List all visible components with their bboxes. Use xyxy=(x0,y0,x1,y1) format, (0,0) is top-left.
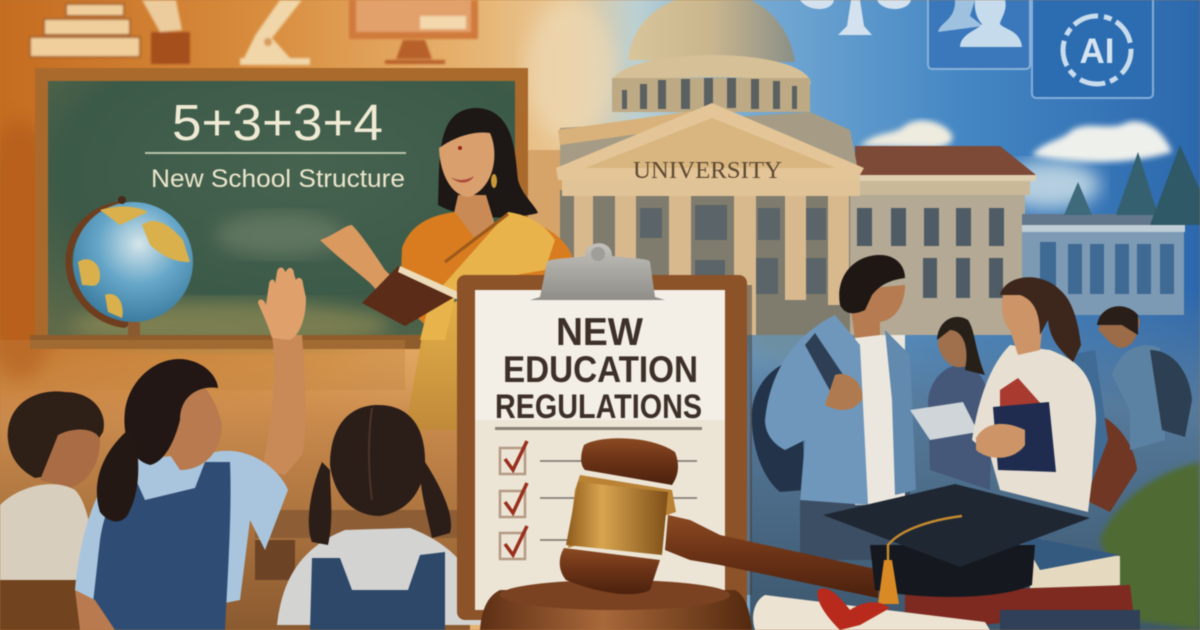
cap base xyxy=(870,545,1035,597)
navy book xyxy=(993,402,1056,472)
icon: microscope xyxy=(240,0,310,65)
handle xyxy=(665,515,880,598)
pediment xyxy=(556,103,864,180)
tee xyxy=(855,335,905,505)
right girl head xyxy=(330,405,425,516)
teacher saree lower drape xyxy=(405,300,458,430)
graduation cap xyxy=(823,484,1090,604)
bush xyxy=(1100,462,1200,630)
student: background girl with tablet xyxy=(910,317,992,490)
university building xyxy=(528,0,1200,335)
teacher book xyxy=(362,266,458,326)
mortarboard xyxy=(823,484,1090,567)
braids xyxy=(309,462,331,545)
backpack xyxy=(752,360,805,492)
globe xyxy=(66,196,193,336)
board title: 5+3+3+4 xyxy=(172,94,383,151)
books under cap xyxy=(905,535,1140,630)
main block xyxy=(560,190,850,335)
icons: education motifs top left xyxy=(30,0,478,65)
icon: stack of books xyxy=(30,4,140,57)
board frame xyxy=(35,68,528,338)
student: man with backpack xyxy=(752,255,916,560)
icon: balance scales xyxy=(800,0,911,35)
boy shirt xyxy=(0,484,93,585)
student: woman with books xyxy=(972,277,1137,512)
metal clip xyxy=(530,243,665,300)
shirt xyxy=(972,345,1096,512)
child: girl with braids xyxy=(277,405,487,630)
raised hand xyxy=(258,268,306,340)
icon: computer monitor xyxy=(349,0,478,64)
strap xyxy=(805,333,850,400)
checklist xyxy=(500,441,697,559)
icon: brown box xyxy=(151,32,190,64)
child: girl raising hand xyxy=(75,268,306,630)
paper xyxy=(475,290,725,610)
title: EDUCATION: EDUCATION xyxy=(503,349,698,390)
teacher gesturing arm xyxy=(320,225,405,310)
board xyxy=(457,275,747,620)
hair xyxy=(1000,277,1081,362)
classroom desk left back xyxy=(0,340,460,580)
right wing xyxy=(850,146,1036,335)
dome xyxy=(612,0,811,112)
chalkboard xyxy=(30,68,528,350)
tassel xyxy=(888,516,962,575)
right girl shirt xyxy=(277,528,487,625)
jeans xyxy=(800,490,910,560)
clipboard xyxy=(457,243,752,620)
title: REGULATIONS: REGULATIONS xyxy=(495,388,702,426)
teacher hair xyxy=(438,108,538,218)
icon: cream shape xyxy=(142,0,182,32)
boy face xyxy=(40,430,100,488)
icon card: people xyxy=(928,0,1030,69)
hand xyxy=(825,374,862,410)
hair xyxy=(839,255,905,313)
label: AI: AI xyxy=(1080,32,1114,71)
right girl pinafore xyxy=(310,552,445,630)
far blue building xyxy=(1022,214,1185,315)
label: UNIVERSITY: UNIVERSITY xyxy=(633,158,782,184)
board ledge xyxy=(30,335,430,349)
red book xyxy=(1000,378,1042,415)
icon card: AI xyxy=(1032,0,1153,98)
raised arm xyxy=(262,335,306,475)
board subtitle: New School Structure xyxy=(151,165,405,193)
left low building xyxy=(528,150,578,290)
teacher neck and face xyxy=(452,195,495,240)
girl arm lower xyxy=(75,590,115,630)
face xyxy=(1002,289,1045,355)
tablet xyxy=(910,402,978,440)
gavel xyxy=(480,438,880,630)
blue strap pack xyxy=(1045,350,1108,500)
diploma scroll xyxy=(753,588,990,630)
child: boy at left xyxy=(0,391,104,630)
hands xyxy=(976,424,1025,458)
desk xyxy=(0,580,80,630)
girl hair xyxy=(124,359,218,465)
title: NEW: NEW xyxy=(556,311,643,354)
girl shirt xyxy=(75,451,288,630)
entablature xyxy=(562,178,860,196)
face xyxy=(848,285,905,338)
teacher saree xyxy=(400,212,573,330)
jacket xyxy=(765,315,868,505)
girl pinafore xyxy=(90,462,231,630)
boy hair xyxy=(8,391,104,478)
girl ponytail xyxy=(97,430,138,522)
girl face xyxy=(160,375,222,470)
head xyxy=(560,438,678,594)
student: man on right xyxy=(1097,306,1192,450)
columns xyxy=(574,195,849,335)
ribbon xyxy=(817,588,890,630)
brown backpack xyxy=(1085,410,1137,512)
trees xyxy=(1064,145,1200,225)
sound block xyxy=(480,580,752,630)
teacher xyxy=(320,108,573,430)
windows xyxy=(640,205,826,294)
